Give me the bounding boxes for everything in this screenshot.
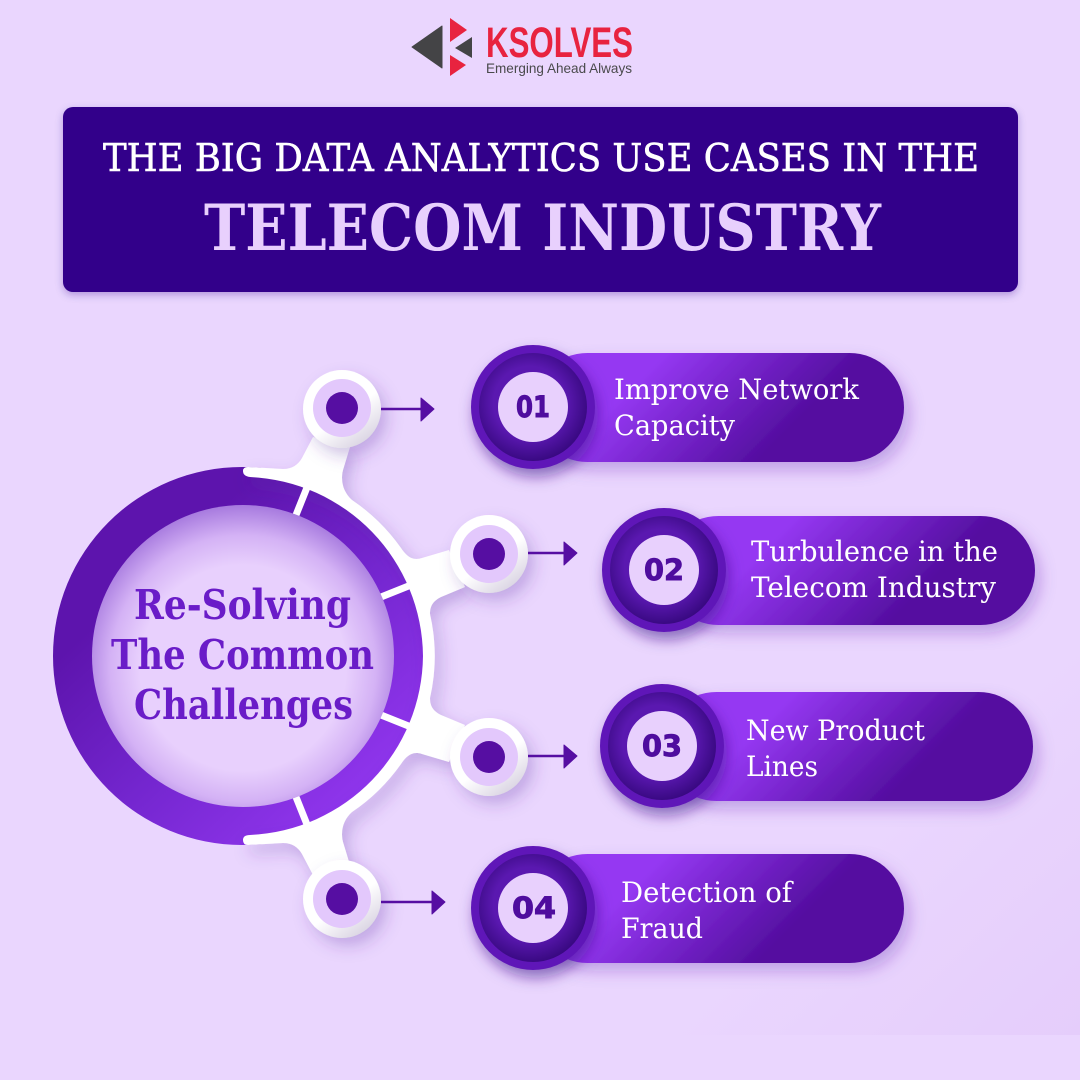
node 4 with arrow	[303, 860, 445, 938]
central hub: Re-Solving The Common Challenges	[53, 437, 465, 875]
item 01: Improve Network Capacity: Capacity	[614, 409, 735, 442]
logo: Ksolves: KSOLVES	[486, 19, 633, 67]
logo: Ksolves: Emerging Ahead Always	[486, 60, 632, 76]
hub heading: Challenges	[134, 681, 353, 729]
logo: Ksolves	[412, 18, 633, 76]
item 02: Turbulence in the Telecom Industry: 02	[644, 553, 684, 587]
item 02: Turbulence in the Telecom Industry	[602, 508, 1035, 632]
item 02: Turbulence in the Telecom Industry: Telecom Industry	[751, 571, 996, 604]
colored ring	[53, 467, 431, 845]
hub heading: Re-Solving	[134, 581, 351, 629]
item 02: Turbulence in the Telecom Industry: Turbulence in the	[751, 535, 998, 568]
inner disc	[92, 505, 394, 807]
item 01: Improve Network Capacity: 01	[516, 390, 550, 424]
ring spokes	[296, 485, 411, 827]
node 3 with arrow	[450, 718, 577, 796]
title banner	[63, 107, 1018, 292]
item 01: Improve Network Capacity: Improve Network	[614, 373, 860, 406]
item 03: New Product Lines: Lines	[746, 750, 818, 783]
item 04: Detection of Fraud: Fraud	[621, 912, 703, 945]
item 04: Detection of Fraud	[471, 846, 904, 970]
item 03: New Product Lines	[600, 684, 1033, 808]
node 2 with arrow	[450, 515, 577, 593]
item 04: Detection of Fraud: Detection of	[621, 876, 795, 909]
item 04: Detection of Fraud: 04	[512, 891, 556, 925]
node 1 with arrow	[303, 370, 434, 448]
white connector arms	[243, 437, 465, 875]
hub heading: The Common	[111, 631, 374, 679]
item 01: Improve Network Capacity	[471, 345, 904, 469]
item 03: New Product Lines: 03	[642, 729, 682, 763]
title banner: THE BIG DATA ANALYTICS USE CASES IN THE	[103, 136, 979, 180]
item 03: New Product Lines: New Product	[746, 714, 926, 747]
hub heading	[111, 581, 374, 729]
title banner: TELECOM INDUSTRY	[204, 191, 882, 266]
